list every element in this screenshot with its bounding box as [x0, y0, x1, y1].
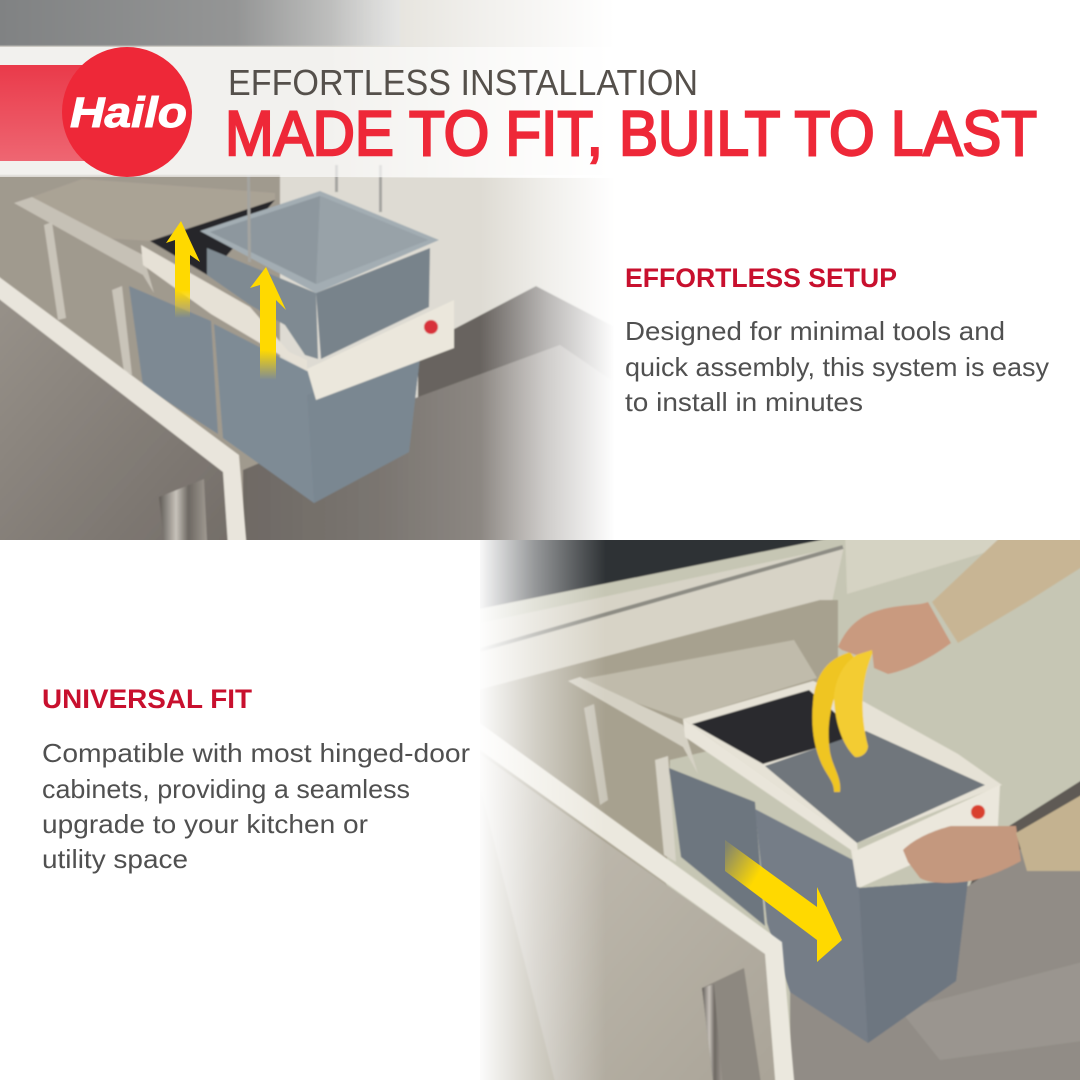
title: MADE TO FIT, BUILT TO LAST: [225, 99, 1037, 169]
door: bottom photo: [470, 716, 795, 1080]
text block: universal fit: [42, 684, 470, 874]
text block: effortless setup: [625, 263, 1049, 417]
logo: Hailo: Hailo: [70, 89, 187, 137]
white fade: top photo to text side: [480, 175, 615, 540]
text block: effortless setup: EFFORTLESS SETUP: [625, 263, 897, 293]
text block: effortless setup: to install in minutes: [625, 387, 863, 417]
text block: effortless setup: Designed for minimal tools and: [625, 316, 1005, 346]
arrow: lift back bin: [166, 221, 200, 318]
fade: top of photo: [330, 0, 615, 178]
red ribbon: [0, 65, 110, 161]
text block: universal fit: cabinets, providing a seamless: [42, 774, 410, 804]
text block: universal fit: UNIVERSAL FIT: [42, 684, 253, 714]
photo: top pull-out bin: [0, 0, 640, 560]
title: EFFORTLESS INSTALLATION: [228, 62, 698, 103]
door: top photo: [0, 270, 248, 560]
text block: effortless setup: quick assembly, this system is easy: [625, 352, 1049, 382]
logo: Hailo: [62, 47, 192, 177]
text block: universal fit: Compatible with most hinged-door: [42, 738, 470, 768]
arrow: lift front bin: [250, 267, 286, 380]
white fade: bottom photo from text side: [476, 540, 606, 1080]
title: [225, 62, 1037, 169]
text block: universal fit: upgrade to your kitchen or: [42, 809, 368, 839]
text block: universal fit: utility space: [42, 844, 188, 874]
header band: [0, 47, 1080, 177]
photo: bottom pull-out bin: [470, 530, 1080, 1080]
white area: top right: [614, 0, 1080, 540]
arrow: pull out: [725, 840, 842, 962]
